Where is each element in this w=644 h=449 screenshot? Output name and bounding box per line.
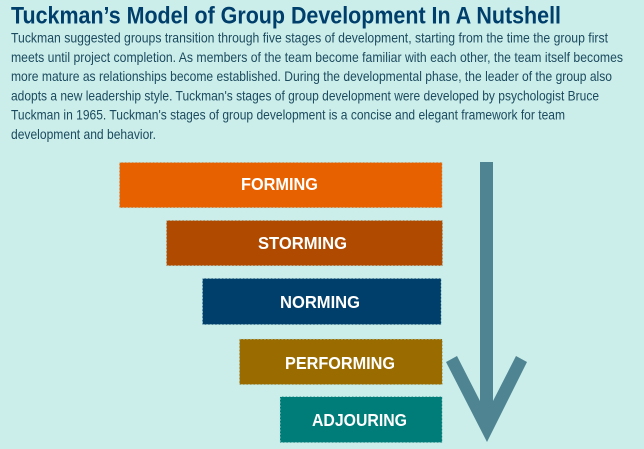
stage bar: performing xyxy=(239,339,442,385)
stage bar: adjourning: ADJOURING xyxy=(312,410,407,430)
stage bar: forming xyxy=(119,162,442,208)
text block: introduction xyxy=(11,30,623,142)
stage bar: storming xyxy=(166,220,443,266)
stage bar: adjourning xyxy=(280,397,442,443)
stage bar: norming xyxy=(202,278,441,325)
stage bar: forming: FORMING xyxy=(241,174,318,194)
stage bar: storming: STORMING xyxy=(258,233,347,253)
stage bar: performing: PERFORMING xyxy=(285,353,395,373)
text block: introduction: Tuckman in 1965. Tuckman's stages of group development is a concise and elegant framework for team xyxy=(11,108,565,123)
text block: introduction: development and behavior. xyxy=(11,127,156,142)
stage bar: norming: NORMING xyxy=(280,292,360,312)
title: Tuckman’s Model of Group Development In A Nutshell xyxy=(11,4,561,30)
arrow: downward progression xyxy=(446,162,527,442)
